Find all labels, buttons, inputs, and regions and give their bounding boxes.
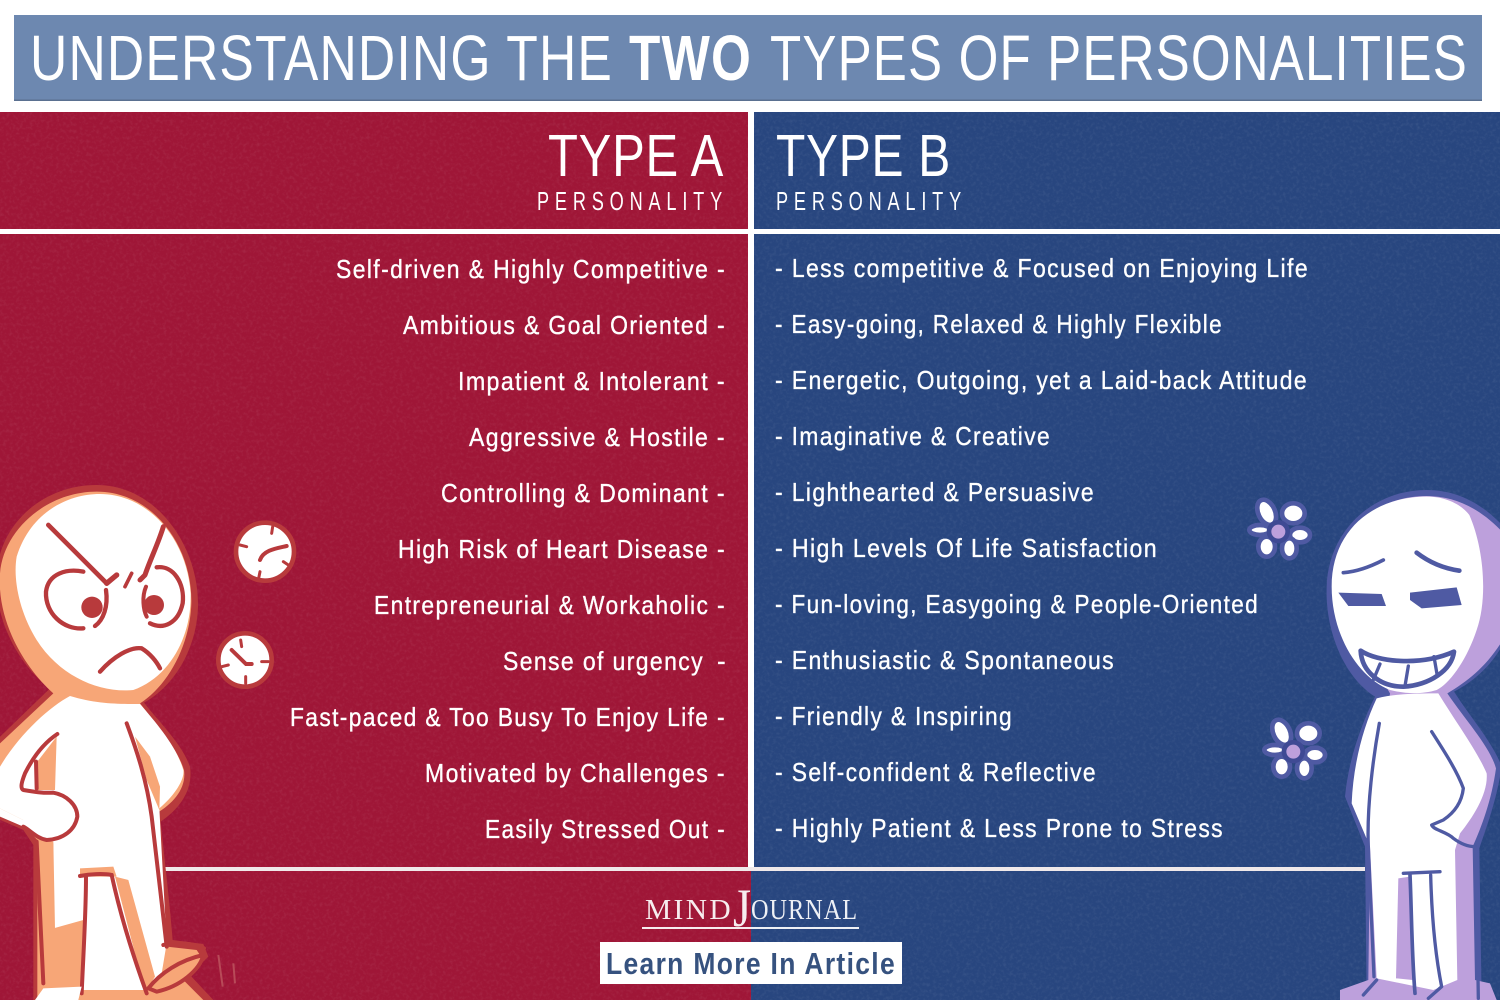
list: type B traits: - Enthusiastic & Spontaneous	[775, 645, 1115, 675]
list: type B traits: - High Levels Of Life Satisfaction	[775, 533, 1158, 563]
torso, arms and legs	[0, 696, 183, 990]
panel: type B background	[751, 112, 1500, 1000]
call to action button: Learn More In Article	[606, 946, 896, 981]
list: type A traits: Controlling & Dominant -	[441, 478, 726, 508]
white shoe	[35, 987, 82, 1000]
heading: type A: TYPE A	[548, 123, 724, 189]
list: type A traits: Impatient & Intolerant -	[458, 366, 726, 396]
motion lines	[218, 955, 235, 987]
logo: Mind Journal: MIND	[645, 894, 733, 926]
logo: Mind Journal: OURNAL	[751, 894, 858, 926]
icon: flower	[1249, 497, 1310, 558]
list: type B traits: - Energetic, Outgoing, yet a Laid-back Attitude	[775, 365, 1308, 395]
list: type A traits	[290, 254, 727, 844]
head	[16, 494, 191, 690]
list: type A traits: Ambitious & Goal Oriented -	[403, 310, 726, 340]
icon: flower	[1264, 717, 1325, 778]
list: type B traits: - Imaginative & Creative	[775, 421, 1051, 451]
list: type A traits: Aggressive & Hostile -	[469, 422, 726, 452]
figure shading	[0, 492, 203, 1000]
inner line work	[1363, 723, 1478, 998]
illustration: smiling type B figure	[1327, 490, 1500, 1000]
list: type A traits: Motivated by Challenges -	[425, 758, 726, 788]
inner line work	[0, 723, 204, 993]
list: type B traits: - Friendly & Inspiring	[775, 701, 1013, 731]
heading: type B: PERSONALITY	[776, 186, 967, 216]
torso, arms and legs	[1352, 693, 1487, 990]
heading: type A: PERSONALITY	[537, 186, 728, 216]
list: type B traits: - Self-confident & Reflective	[775, 757, 1097, 787]
title text	[30, 22, 1468, 94]
list: type A traits: Self-driven & Highly Competitive -	[336, 254, 726, 284]
list: type B traits	[775, 253, 1309, 843]
title text: UNDERSTANDING THE	[30, 22, 613, 94]
heading: type A	[537, 123, 728, 216]
list: type B traits: - Lighthearted & Persuasive	[775, 477, 1095, 507]
heading: type B: TYPE B	[776, 123, 951, 189]
logo: Mind Journal: J	[733, 878, 751, 938]
figure outline	[0, 485, 213, 1000]
list: type B traits: - Easy-going, Relaxed & Highly Flexible	[775, 309, 1223, 339]
heading: type B	[776, 123, 967, 216]
panel: type A background	[0, 112, 751, 1000]
figure outline	[1327, 490, 1500, 1000]
list: type B traits: - Fun-loving, Easygoing & People-Oriented	[775, 589, 1259, 619]
header divider	[0, 229, 1500, 234]
list: type A traits: Entrepreneurial & Workaholic -	[374, 590, 726, 620]
list: type A traits: High Risk of Heart Disease -	[398, 534, 726, 564]
list: type A traits: -	[717, 646, 727, 676]
footer divider	[160, 867, 1365, 871]
smiling face	[1338, 553, 1462, 687]
list: type A traits: Easily Stressed Out -	[485, 814, 726, 844]
head	[1332, 497, 1483, 693]
lilac leg shadow	[1396, 877, 1413, 980]
list: type B traits: - Less competitive & Focused on Enjoying Life	[775, 253, 1309, 283]
figure shading	[1333, 496, 1500, 1000]
peach shadow patches	[37, 737, 160, 990]
angry face	[46, 525, 183, 672]
list: type B traits: - Highly Patient & Less Prone to Stress	[775, 813, 1224, 843]
logo: Mind Journal	[642, 878, 859, 938]
icon: clock	[236, 523, 294, 581]
vertical divider	[748, 112, 754, 869]
illustration: angry type A figure	[0, 485, 235, 1000]
icon: clock	[218, 633, 272, 687]
list: type A traits: Fast-paced & Too Busy To Enjoy Life -	[290, 702, 726, 732]
title banner	[14, 15, 1482, 101]
title text: TWO	[629, 22, 752, 94]
list: type A traits: Sense of urgency	[503, 646, 704, 676]
